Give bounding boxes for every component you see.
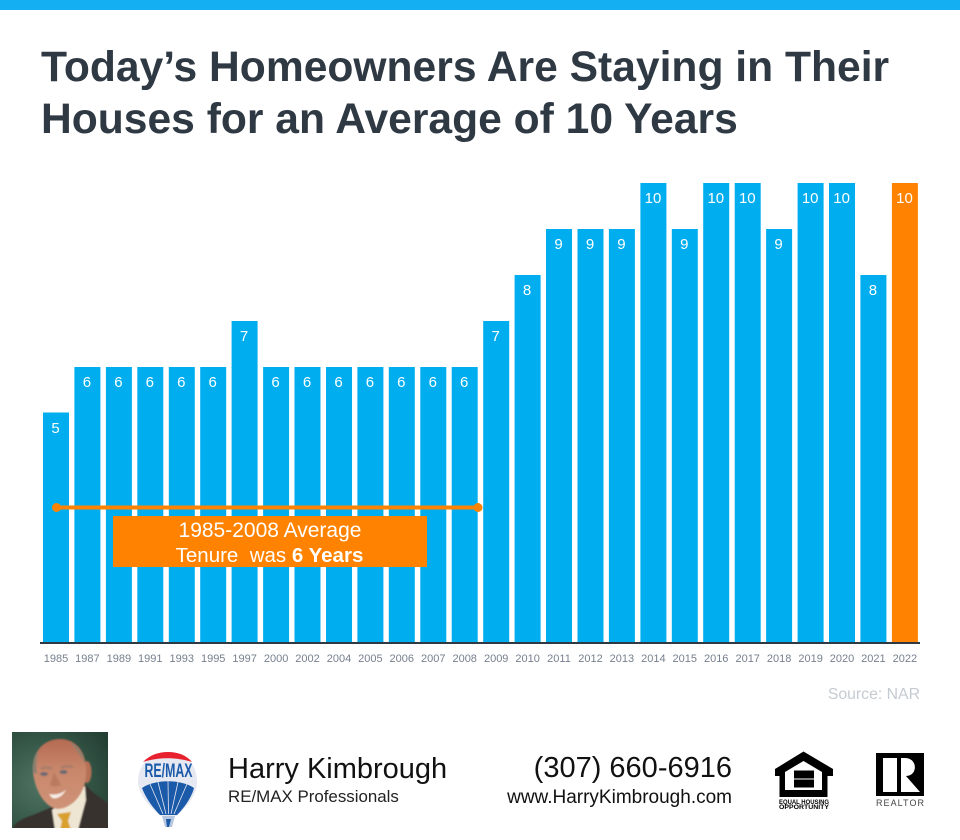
bar: 2004: 6 bbox=[334, 374, 343, 391]
bar: 1987 bbox=[74, 367, 100, 642]
average line 1985-2008 bbox=[52, 503, 482, 512]
bar: 2008: 6 bbox=[460, 374, 468, 391]
x axis year labels: 2013 bbox=[610, 653, 634, 665]
bar: 2016: 10 bbox=[707, 190, 724, 207]
equal housing opportunity logo bbox=[775, 752, 833, 811]
x axis year labels: 2004 bbox=[327, 653, 351, 665]
bar: 2008 bbox=[452, 367, 478, 642]
x axis year labels: 2014 bbox=[641, 653, 666, 665]
bar: 2006: 6 bbox=[397, 374, 405, 391]
x axis year labels: 2017 bbox=[735, 653, 760, 665]
bar: 2015 bbox=[672, 229, 698, 642]
x axis year labels: 2010 bbox=[515, 653, 540, 665]
bar: 2007 bbox=[420, 367, 446, 642]
x axis year labels: 2005 bbox=[358, 653, 383, 665]
agent portrait bbox=[12, 732, 108, 830]
bar: 2016 bbox=[703, 183, 729, 642]
bar: 1987: 6 bbox=[83, 374, 91, 391]
bar: 2015: 9 bbox=[680, 236, 688, 253]
bar: 2020: 10 bbox=[833, 190, 850, 207]
x axis year labels bbox=[44, 653, 917, 665]
bar: 2009: 7 bbox=[492, 328, 500, 345]
bar: 2012 bbox=[578, 229, 604, 642]
x axis year labels: 2021 bbox=[861, 653, 886, 665]
bar: 1985 bbox=[43, 412, 69, 642]
bar: 2002 bbox=[294, 367, 320, 642]
bar chart bbox=[43, 183, 918, 642]
phone number: (307) 660-6916 bbox=[534, 752, 732, 784]
bar: 2010: 8 bbox=[523, 282, 531, 299]
x axis year labels: 2000 bbox=[264, 653, 288, 665]
RE/MAX balloon logo bbox=[138, 752, 197, 827]
top accent bar bbox=[0, 0, 960, 10]
bar: 2006 bbox=[389, 367, 415, 642]
bar: 2005: 6 bbox=[366, 374, 374, 391]
website: www.HarryKimbrough.com bbox=[506, 787, 732, 808]
bar: 2013: 9 bbox=[617, 236, 626, 253]
callout: average tenure bbox=[113, 516, 427, 567]
title: Today’s Homeowners Are Staying in Their bbox=[41, 43, 889, 91]
bar: 1989: 6 bbox=[114, 374, 123, 391]
bar: 1991 bbox=[137, 367, 163, 642]
x axis year labels: 1987 bbox=[75, 653, 100, 665]
bar: 1991: 6 bbox=[146, 374, 154, 391]
x axis year labels: 2019 bbox=[798, 653, 823, 665]
bar: 1989 bbox=[106, 367, 132, 642]
x axis year labels: 2012 bbox=[578, 653, 603, 665]
x axis year labels: 2009 bbox=[484, 653, 508, 665]
agent company: RE/MAX Professionals bbox=[228, 787, 399, 806]
bar: 2014 bbox=[640, 183, 666, 642]
bar: 2011: 9 bbox=[554, 236, 563, 253]
realtor logo: REALTOR bbox=[876, 798, 924, 808]
x axis year labels: 1995 bbox=[201, 653, 225, 665]
bar: 2004 bbox=[326, 367, 352, 642]
bar: 2009 bbox=[483, 321, 509, 642]
x axis year labels: 2016 bbox=[704, 653, 728, 665]
bar: 2014: 10 bbox=[645, 190, 661, 207]
title bbox=[41, 43, 889, 143]
source note: Source: NAR bbox=[828, 686, 920, 703]
agent name: Harry Kimbrough bbox=[228, 753, 447, 785]
x axis year labels: 2020 bbox=[830, 653, 854, 665]
bar: 2018: 9 bbox=[774, 236, 783, 253]
x axis year labels: 2008 bbox=[452, 653, 477, 665]
x axis year labels: 2002 bbox=[295, 653, 320, 665]
x axis year labels: 2018 bbox=[767, 653, 791, 665]
bar: 2021 bbox=[860, 275, 886, 642]
equal housing opportunity logo: OPPORTUNITY bbox=[779, 805, 829, 811]
x axis year labels: 2006 bbox=[390, 653, 414, 665]
bar: 2022 highlighted: 10 bbox=[896, 190, 913, 207]
x axis year labels: 1991 bbox=[138, 653, 163, 665]
bar: 2019 bbox=[798, 183, 824, 642]
bar: 1993: 6 bbox=[177, 374, 185, 391]
x axis year labels: 1997 bbox=[232, 653, 257, 665]
equal housing opportunity logo: EQUAL HOUSING bbox=[779, 800, 829, 806]
bar: 2012: 9 bbox=[586, 236, 594, 253]
bar: 1995 bbox=[200, 367, 226, 642]
realtor logo bbox=[876, 753, 924, 808]
bar: 2007: 6 bbox=[429, 374, 437, 391]
x axis year labels: 1989 bbox=[107, 653, 131, 665]
callout: average tenure: Tenure was 6 Years bbox=[176, 544, 363, 567]
bar: 2022 highlighted bbox=[892, 183, 918, 642]
bar: 1995: 6 bbox=[209, 374, 217, 391]
bar: 2011 bbox=[546, 229, 572, 642]
bar: 1997: 7 bbox=[240, 328, 248, 345]
x axis year labels: 2022 bbox=[893, 653, 917, 665]
bar: 1997 bbox=[232, 321, 258, 642]
bar: 2005 bbox=[357, 367, 383, 642]
bar: 2013 bbox=[609, 229, 635, 642]
bar: 1985: 5 bbox=[51, 420, 60, 437]
bar: 2000: 6 bbox=[271, 374, 280, 391]
x axis year labels: 2011 bbox=[547, 653, 571, 665]
RE/MAX balloon logo: RE/MAX bbox=[144, 761, 193, 782]
x axis year labels: 2007 bbox=[421, 653, 446, 665]
bar: 2021: 8 bbox=[869, 282, 877, 299]
bar: 2018 bbox=[766, 229, 792, 642]
bar: 1993 bbox=[169, 367, 195, 642]
bar: 2010 bbox=[515, 275, 541, 642]
bar: 2002: 6 bbox=[303, 374, 311, 391]
x axis line bbox=[40, 642, 920, 644]
bar: 2017 bbox=[735, 183, 761, 642]
bar: 2019: 10 bbox=[802, 190, 819, 207]
title: Houses for an Average of 10 Years bbox=[41, 95, 738, 143]
x axis year labels: 2015 bbox=[673, 653, 697, 665]
x axis year labels: 1985 bbox=[44, 653, 68, 665]
bar: 2017: 10 bbox=[739, 190, 756, 207]
bar: 2020 bbox=[829, 183, 855, 642]
bar: 2000 bbox=[263, 367, 289, 642]
x axis year labels: 1993 bbox=[170, 653, 194, 665]
callout: average tenure: 1985-2008 Average bbox=[179, 519, 361, 542]
